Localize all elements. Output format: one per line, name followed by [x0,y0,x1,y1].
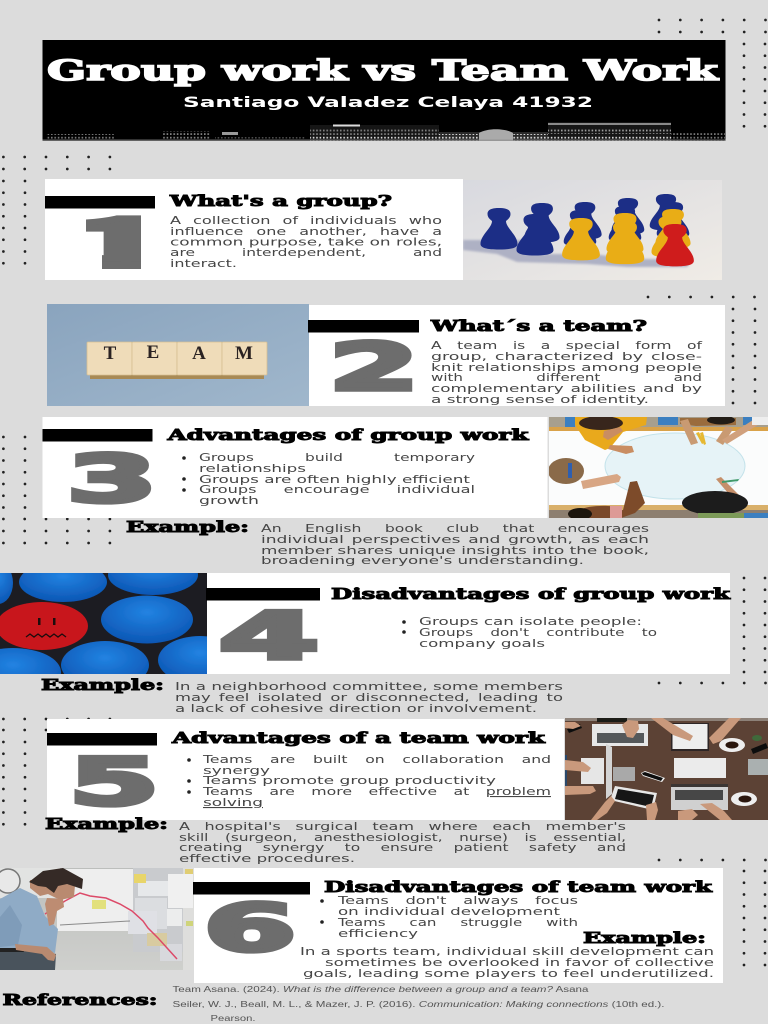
definition text [431,339,704,406]
bullet list: solving [203,796,263,809]
photo: man looking at falling chart [0,868,194,970]
bullet list: Groups are often highly efficient [199,473,471,486]
bullet list: Teams promote group productivity [201,774,497,787]
bullet list: Groups encourage individual [199,483,475,496]
reference entries: Team Asana. (2024). What is the difference between a group and a team? Asana [172,985,589,994]
photo: blue candies and red sad candy [0,573,207,674]
number 3: 3 [67,442,157,518]
bullet list: synergy [203,764,271,777]
heading: What's a group? [168,192,392,210]
title banner [42,40,726,141]
example: team advantages: skill (surgeon, anesthesiologist, nurse) is essential, [179,831,626,844]
panel 6: disadvantages of team work [193,868,723,983]
example: team advantages: A hospital's surgical team where each member's [179,820,626,833]
example text: sometimes be overlooked in favor of collective [325,956,714,969]
photo: children drawing at a table [548,416,768,520]
example: group advantages: Example: [126,518,249,536]
panel 4: disadvantages of group work [206,573,731,674]
bullet list: Teams don't always focus [337,894,578,907]
definition text: are interdependent, and [170,246,442,259]
definition text: A team is a special form of [431,339,704,352]
number 6: 6 [204,892,296,966]
number 1: 1 [67,190,177,286]
example: group disadvantages: Example: [41,676,164,694]
bullet list [187,753,551,809]
author subtitle: Santiago Valadez Celaya 41932 [183,95,593,111]
bullet list [320,894,578,940]
example text [300,945,714,980]
definition text: influence one another, have a [170,225,442,238]
title: Group work vs Team Work [47,54,719,87]
bullet list: efficiency [338,927,419,940]
definition text: knit relationships among people [431,361,702,374]
definition text: complementary abilities and by [431,382,703,395]
bullet list: on individual development [338,905,561,918]
reference entries: Seiler, W. J., Beall, M. L., & Mazer, J. P. (2016). Communication: Making connections (10th ed.). [172,1000,664,1009]
bullet list: Groups build temporary [199,451,476,464]
example: group advantages: member shares unique insights into the book, [261,544,649,557]
references [2,985,664,1023]
tile letters: A [192,343,206,364]
example: group advantages: individual perspectives and growth, as each [261,533,649,546]
example: team advantages [45,815,626,865]
photo: pawns [463,180,722,280]
tile letters: T [104,343,117,364]
panel 2: what's a team [308,305,725,406]
panel 3: advantages of group work [42,417,548,518]
definition text: with different and [431,371,702,384]
man [0,868,83,970]
references label: References: [2,991,158,1009]
definition text [170,214,442,270]
tiles [87,342,267,375]
red candy [0,602,88,650]
reference entries: Pearson. [210,1014,256,1023]
photo: team tiles [47,304,309,406]
example label: Example: [583,929,706,947]
example: group disadvantages: may feel isolated or disconnected, leading to [175,691,563,704]
example: team advantages: effective procedures. [179,852,355,865]
bullet list: Groups can isolate people: [419,615,642,628]
example: group advantages [126,518,649,567]
bullet list: Teams are more effective at problem [202,785,551,798]
example: team advantages: Example: [45,815,168,833]
tile letters [104,346,252,359]
definition text: A collection of individuals who [170,214,442,227]
bullet list: relationships [199,462,306,475]
definition text: a strong sense of identity. [431,393,649,406]
bullet list [402,615,657,650]
number 4: 4 [219,600,319,674]
heading: Advantages of a team work [170,729,546,747]
tile letters: M [235,343,253,364]
bullet list: Teams are built on collaboration and [202,753,551,766]
number 5: 5 [69,746,159,820]
bullet list: Groups don't contribute to [419,626,657,639]
city skyline [42,122,726,141]
reference entries [172,985,664,1023]
panel 1: what's a group [45,179,463,286]
heading: Advantages of group work [166,426,529,444]
example: group advantages: broadening everyone's understanding. [261,554,584,567]
example text: goals, leading some players to feel underutilized. [303,967,714,980]
number 2: 2 [329,330,419,406]
bullet list: growth [199,494,259,507]
photo: office desk from above [564,718,768,820]
example: group disadvantages [41,676,563,715]
example text: In a sports team, individual skill development can [300,945,714,958]
bullet list: company goals [419,637,545,650]
panel 5: advantages of a team work [47,719,564,820]
definition text: interact. [170,257,237,270]
top laptop [592,724,648,746]
bullet list [182,451,476,507]
example: group advantages: An English book club that encourages [261,522,649,535]
heading: Disadvantages of group work [331,585,731,603]
example: group disadvantages: a lack of cohesive direction or involvement. [175,702,537,715]
definition text: common purpose, take on roles, [170,236,442,248]
definition text: group, characterized by close- [431,350,702,363]
example: team advantages: creating synergy to ensure patient safety and [179,841,626,854]
heading: Disadvantages of team work [324,878,713,896]
heading: What´s a team? [429,317,647,335]
bullet list: Teams can struggle with [337,916,578,929]
tile letters: E [147,342,159,363]
example: group disadvantages: In a neighborhood committee, some members [175,680,563,693]
